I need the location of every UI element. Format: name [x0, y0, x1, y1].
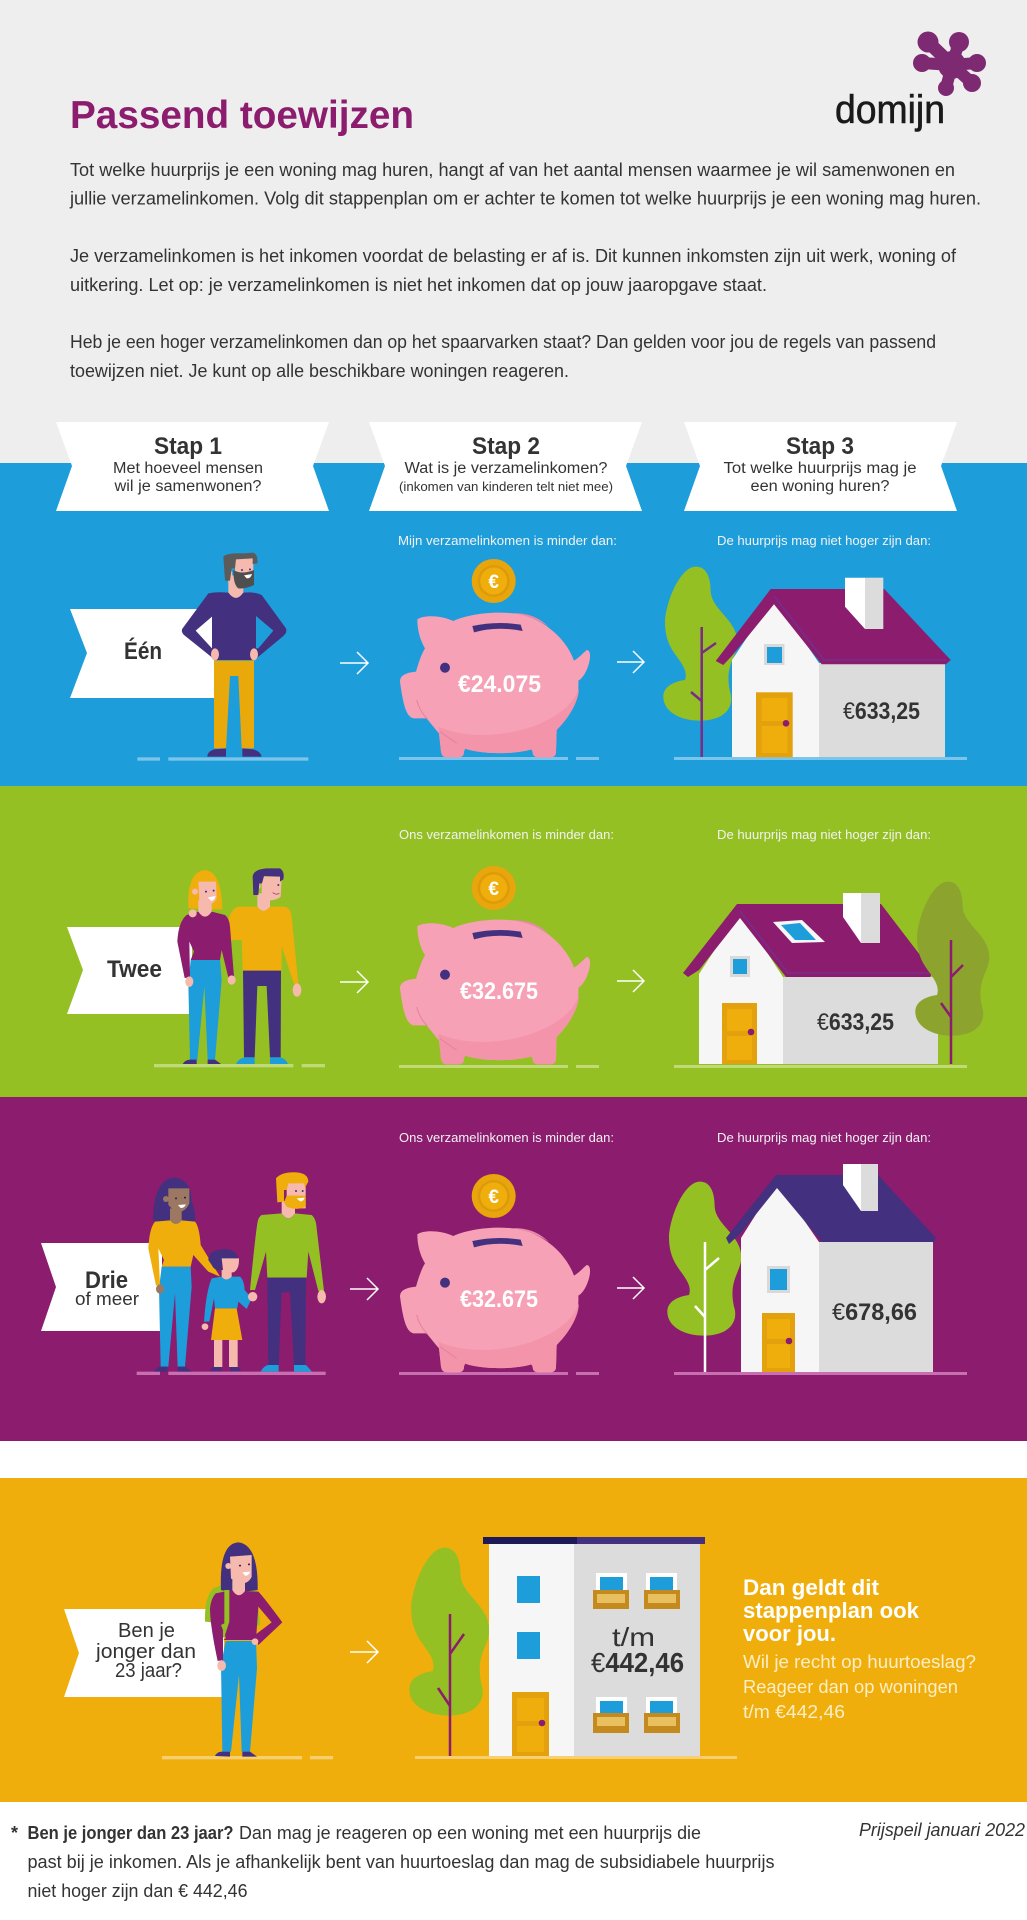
panel: row twee (green)	[0, 786, 1027, 1097]
banner: stap 1: Stap 1	[154, 433, 222, 460]
ribbon: Twee	[67, 927, 192, 1014]
illustration: piggy bank: €32.675	[460, 1286, 538, 1313]
label: rent heading: De huurprijs mag niet hoger zijn dan:	[717, 1131, 931, 1145]
illustration: piggy bank: €32.675	[460, 978, 538, 1005]
footnote: niet hoger zijn dan € 442,46	[28, 1881, 248, 1901]
footnote: Dan mag je reageren op een woning met een huurprijs die	[239, 1823, 701, 1843]
illustration: piggy bank	[399, 559, 599, 760]
ribbon: Een	[70, 609, 214, 698]
banner: stap 2: Wat is je verzamelinkomen?	[404, 460, 608, 477]
ribbon: ben je jonger dan 23 jaar: 23 jaar?	[115, 1660, 182, 1682]
ribbon: Drie of meer	[41, 1243, 162, 1331]
logo wordmark: domijn	[835, 88, 945, 132]
logo: domijn	[835, 32, 986, 132]
text block: verzamelinkomen	[70, 246, 957, 295]
text block: hoger inkomen	[70, 332, 936, 381]
illustration: piggy bank	[399, 866, 599, 1068]
illustration: piggy bank: €	[488, 1187, 499, 1208]
arrow	[350, 1641, 378, 1663]
arrow	[617, 970, 644, 992]
illustration: family	[137, 1172, 326, 1375]
ribbon: ben je jonger dan 23 jaar: jonger dan	[95, 1641, 196, 1663]
text block: conditions: t/m €442,46	[743, 1702, 845, 1722]
text block: intro: jullie verzamelinkomen. Volg dit stappenplan om er achter te komen tot welke huurprijs je een woning mag huren.	[69, 188, 981, 208]
footnote: *	[11, 1823, 18, 1843]
banner: stap 1: wil je samenwonen?	[113, 478, 262, 495]
ribbon: Drie of meer: of meer	[75, 1289, 139, 1309]
illustration: couple	[154, 868, 325, 1067]
illustration: house	[667, 1164, 967, 1375]
banner: stap 3: Tot welke huurprijs mag je	[724, 460, 916, 477]
illustration: house: €678,66	[832, 1299, 917, 1326]
banner: stap 3	[684, 422, 957, 511]
illustration: apartment building	[409, 1537, 737, 1759]
illustration: house	[674, 882, 989, 1068]
arrow	[617, 651, 644, 673]
label: income heading: Mijn verzamelinkomen is minder dan:	[398, 534, 617, 548]
price level note: Prijspeil januari 2022	[859, 1820, 1025, 1840]
text block: intro	[69, 160, 981, 208]
arrow	[340, 652, 368, 674]
banner: stap 3: een woning huren?	[750, 478, 890, 495]
step banners	[56, 422, 957, 511]
banner: stap 1: Met hoeveel mensen	[113, 460, 263, 477]
illustration: piggy bank: €	[488, 879, 499, 900]
text block: hoger inkomen: toewijzen niet. Je kunt op alle beschikbare woningen reageren.	[70, 361, 569, 381]
illustration: house	[663, 567, 967, 760]
banner: stap 2: Stap 2	[472, 433, 540, 460]
text block: hoger inkomen: Heb je een hoger verzamelinkomen dan op het spaarvarken staat? Dan gelden voor jou de regels van passend	[70, 332, 936, 352]
panel: header background	[0, 0, 1027, 463]
text block: conditions: voor jou.	[743, 1621, 836, 1646]
text block: intro: Tot welke huurprijs je een woning mag huren, hangt af van het aantal mensen waarmee je wil samenwonen en	[70, 160, 955, 180]
text block: conditions: stappenplan ook	[743, 1598, 920, 1623]
text block: conditions: Reageer dan op woningen	[743, 1677, 958, 1697]
title: Passend toewijzen	[70, 94, 414, 137]
illustration: apartment building: t/m	[612, 1622, 655, 1652]
panel: row een (blue)	[0, 463, 1027, 786]
illustration: piggy bank: €	[488, 572, 499, 593]
banner: stap 2: (inkomen van kinderen telt niet mee)	[399, 479, 613, 494]
banner: stap 1	[56, 422, 329, 511]
footnote: Ben je jonger dan 23 jaar?	[28, 1823, 234, 1843]
label: income heading: Ons verzamelinkomen is minder dan:	[399, 1131, 614, 1145]
banner: stap 3: Stap 3	[786, 433, 854, 460]
label: rent heading: De huurprijs mag niet hoger zijn dan:	[717, 828, 931, 842]
arrow	[350, 1278, 378, 1300]
icon: logo flower	[913, 32, 986, 96]
illustration: man	[137, 553, 308, 761]
text block: conditions	[743, 1575, 976, 1722]
text block: verzamelinkomen: Je verzamelinkomen is het inkomen voordat de belasting er af is. Dit kunnen inkomsten zijn uit werk, woning of	[70, 246, 957, 266]
illustration: house: €633,25	[817, 1009, 894, 1036]
illustration: house: €633,25	[843, 698, 920, 725]
illustration: young woman	[162, 1542, 333, 1759]
illustration: piggy bank: €24.075	[458, 671, 541, 698]
banner: stap 2	[369, 422, 642, 511]
label: rent heading: De huurprijs mag niet hoger zijn dan:	[717, 534, 931, 548]
text block: verzamelinkomen: uitkering. Let op: je verzamelinkomen is niet het inkomen dat op jouw jaaropgave staat.	[70, 275, 767, 295]
ribbon: Twee: Twee	[107, 956, 162, 983]
footnote: past bij je inkomen. Als je afhankelijk bent van huurtoeslag dan mag de subsidiabele huurprijs	[28, 1852, 774, 1872]
illustration: apartment building: €442,46	[591, 1647, 684, 1678]
illustration: piggy bank	[399, 1174, 599, 1375]
ribbon: Drie of meer: Drie	[85, 1267, 128, 1294]
label: income heading: Ons verzamelinkomen is minder dan:	[399, 828, 614, 842]
ribbon: ben je jonger dan 23 jaar	[64, 1609, 224, 1697]
text block: conditions: Dan geldt dit	[743, 1575, 880, 1600]
text block: conditions: Wil je recht op huurtoeslag?	[743, 1652, 976, 1672]
panel: jonger dan 23 (yellow)	[0, 1478, 1027, 1802]
ribbon: Een: Één	[124, 637, 162, 665]
panel: row drie (purple)	[0, 1097, 1027, 1441]
arrow	[340, 971, 368, 993]
footnote	[11, 1823, 774, 1901]
ribbon: ben je jonger dan 23 jaar: Ben je	[118, 1620, 175, 1642]
arrow	[617, 1277, 644, 1299]
